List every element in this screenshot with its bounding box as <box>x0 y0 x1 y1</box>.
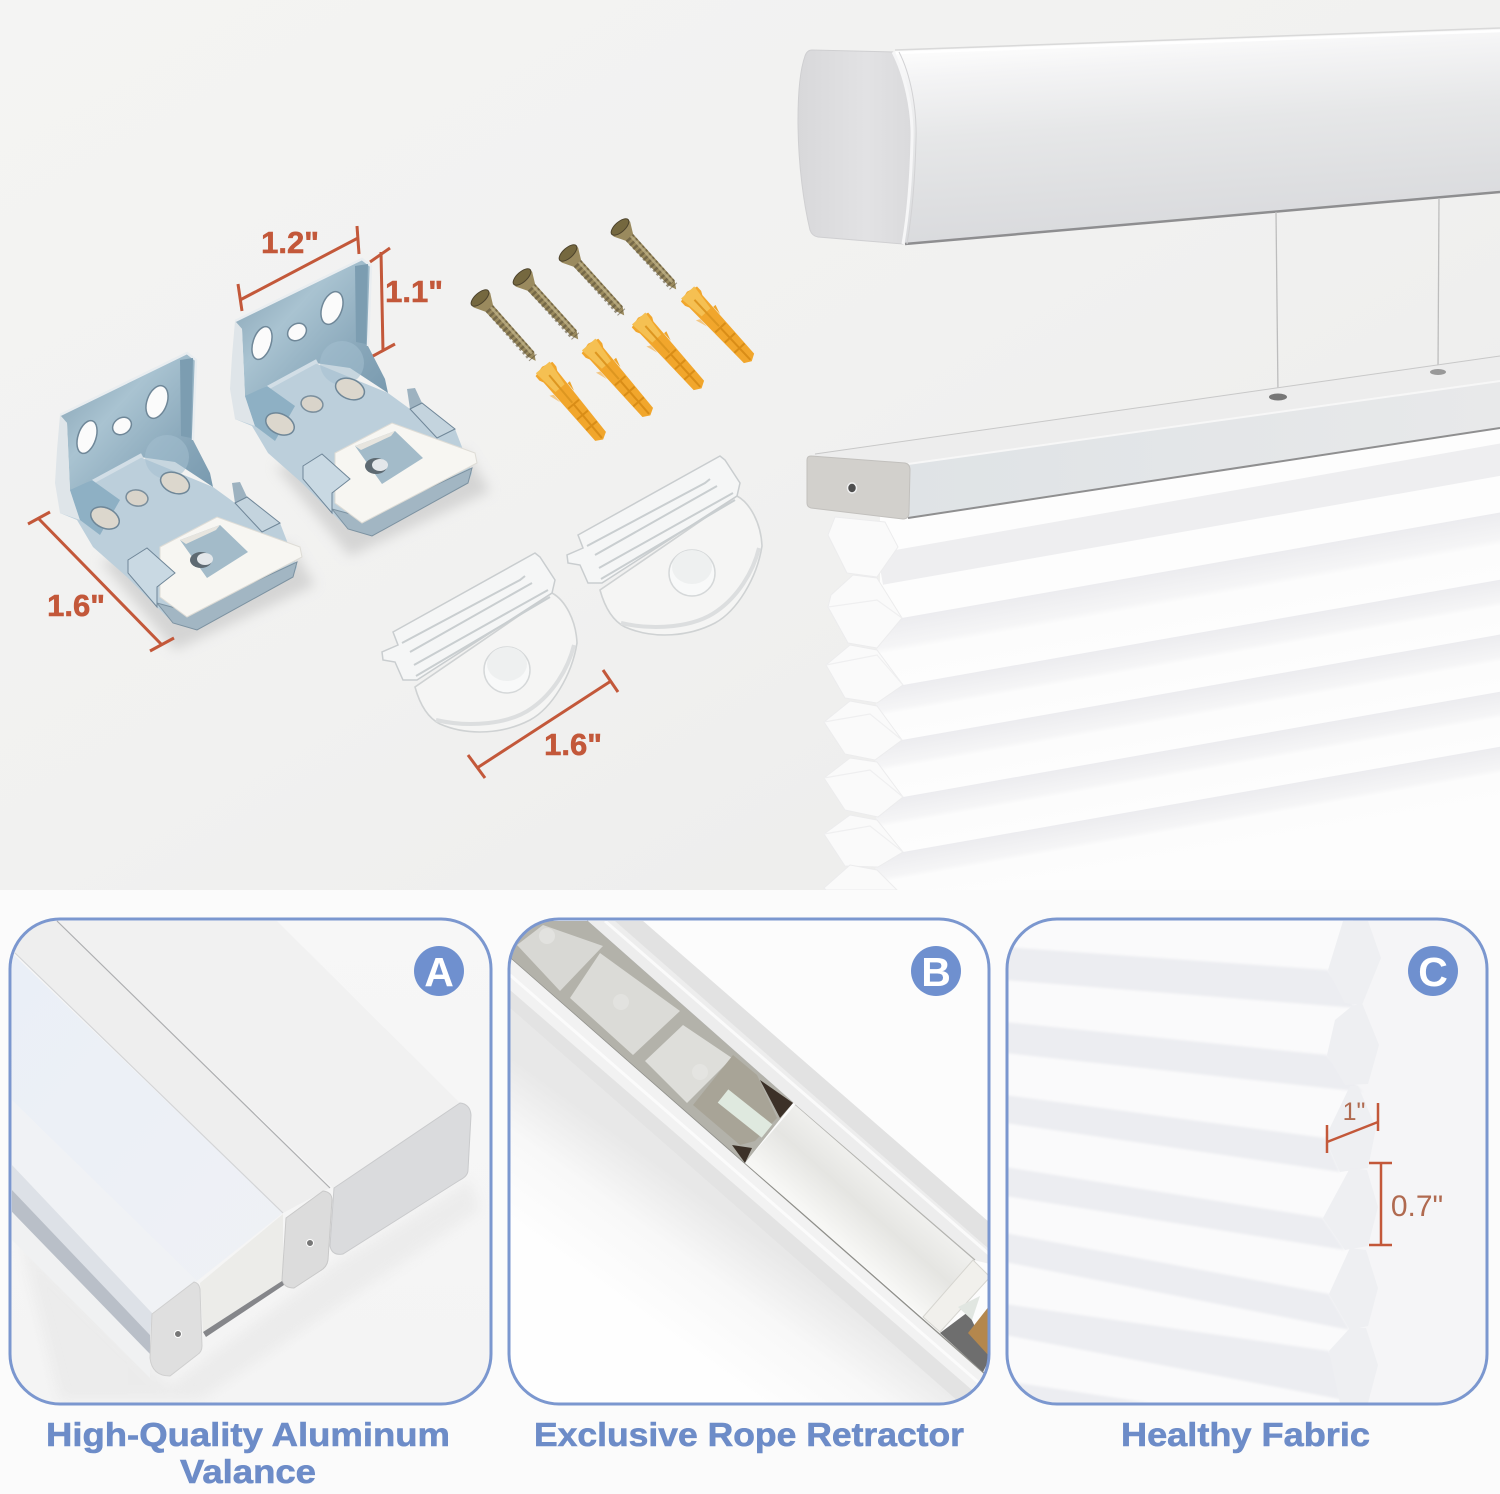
clear clip front <box>382 553 577 732</box>
dimension: clip width 1.6: 1.6" <box>544 727 602 762</box>
bracket right <box>230 259 490 556</box>
dimension: cell width 1: 1" <box>1343 1098 1365 1126</box>
dimension: bracket height 1.1 <box>370 248 443 356</box>
end fitting and brass <box>940 1312 990 1372</box>
middle end cap <box>282 1191 332 1288</box>
badge C <box>1408 946 1458 996</box>
badge B <box>911 946 961 996</box>
panel B: rope retractor <box>509 919 990 1404</box>
fabric cell ends <box>824 517 903 890</box>
dimension: bracket height 1.1: 1.1" <box>385 274 443 309</box>
cellular fabric <box>824 420 1500 912</box>
front end cap <box>150 1282 202 1376</box>
lower left shadow background <box>510 1000 960 1403</box>
caption A: High-Quality Aluminum <box>46 1416 450 1453</box>
headrail with end cap <box>798 28 1500 244</box>
dimension: bracket depth 1.6: 1.6" <box>47 588 105 623</box>
badge A <box>414 946 464 996</box>
fabric side <box>200 1214 283 1332</box>
screw 1 <box>468 287 544 368</box>
dimension: cell height 0.7 <box>1369 1163 1443 1245</box>
dimension: cell width 1 <box>1327 1098 1378 1153</box>
dimension: bracket width 1.2: 1.2" <box>261 225 319 260</box>
badge C: C <box>1418 949 1448 995</box>
panel C: healthy fabric <box>1005 919 1487 1404</box>
wall anchor 3 <box>628 310 710 397</box>
badge A: A <box>424 949 454 995</box>
wall anchor 4 <box>677 284 761 370</box>
dimension: bracket depth 1.6 <box>28 512 174 651</box>
white cylinder <box>745 1105 973 1317</box>
panel A: aluminum valance <box>10 919 491 1404</box>
grey fabric bands <box>1005 947 1363 1403</box>
cell ends <box>1324 921 1353 1402</box>
dimension: cell height 0.7: 0.7" <box>1391 1190 1443 1223</box>
clear clip back <box>567 456 762 635</box>
rail top faces <box>12 920 330 1354</box>
screw 3 <box>556 242 632 323</box>
caption C: Healthy Fabric <box>1121 1416 1370 1453</box>
lift cords <box>1276 198 1439 394</box>
left rail <box>510 957 985 1403</box>
inner channel with mechanism <box>510 921 793 1163</box>
caption B: Exclusive Rope Retractor <box>534 1416 964 1453</box>
dimension: clip width 1.6 <box>468 670 618 778</box>
wall anchor 2 <box>578 336 659 424</box>
caption A <box>46 1416 450 1490</box>
screw 4 <box>608 216 684 297</box>
bracket left <box>55 353 315 650</box>
dimension: bracket width 1.2 <box>238 225 359 311</box>
bottom rail <box>807 356 1500 519</box>
badge B: B <box>921 949 951 995</box>
product photo background <box>0 0 1500 890</box>
caption A: Valance <box>180 1453 316 1490</box>
screw 2 <box>510 266 586 347</box>
wall anchor 1 <box>532 359 612 448</box>
big end cap <box>330 1103 471 1254</box>
right rail <box>587 921 990 1264</box>
